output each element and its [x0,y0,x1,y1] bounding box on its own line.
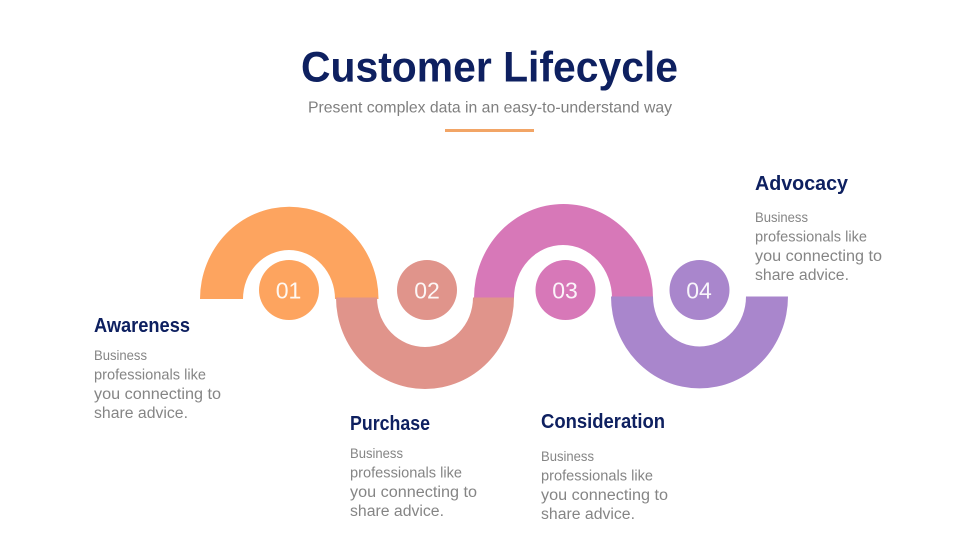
text block: Awareness: Business [94,347,147,363]
step 02 badge: 02 [414,278,440,304]
text block: Purchase: you connecting to [350,484,477,501]
text block: Awareness: you connecting to [94,386,221,403]
text block: Awareness: Awareness [94,315,190,337]
arc: purple [611,296,788,388]
arc: orange [200,207,378,299]
step 02 badge [397,260,457,320]
text block: Consideration: Consideration [541,411,665,433]
text block: Awareness: professionals like [94,368,206,384]
text block: Advocacy: professionals like [755,230,867,246]
text block: Consideration: you connecting to [541,487,668,504]
text block: Consideration: professionals like [541,468,653,484]
text block: Advocacy: Business [755,209,808,225]
step 01 badge [259,260,319,320]
text block: Consideration [541,411,668,523]
text block: Advocacy [755,173,882,284]
text block: Purchase: share advice. [350,503,444,520]
subtitle: Present complex data in an easy-to-understand way [308,100,672,116]
text block: Advocacy: share advice. [755,267,849,284]
step 04 badge [670,260,730,320]
text block: Awareness [94,315,221,422]
step 03 badge [536,260,596,320]
arc: salmon [336,298,514,389]
title: Customer Lifecycle [301,44,678,92]
text block: Advocacy: Advocacy [755,173,849,195]
step 03 badge: 03 [552,278,578,304]
text block: Advocacy: you connecting to [755,248,882,265]
text block: Consideration: Business [541,448,594,464]
text block: Awareness: share advice. [94,405,188,422]
accent line [445,129,534,132]
text block: Purchase: Business [350,445,403,461]
step 04 badge: 04 [686,278,712,304]
text block: Purchase: Purchase [350,413,430,435]
arc: magenta [474,204,653,298]
step 01 badge: 01 [276,278,301,304]
text block: Purchase [350,413,477,520]
text block: Purchase: professionals like [350,466,462,482]
text block: Consideration: share advice. [541,506,635,523]
